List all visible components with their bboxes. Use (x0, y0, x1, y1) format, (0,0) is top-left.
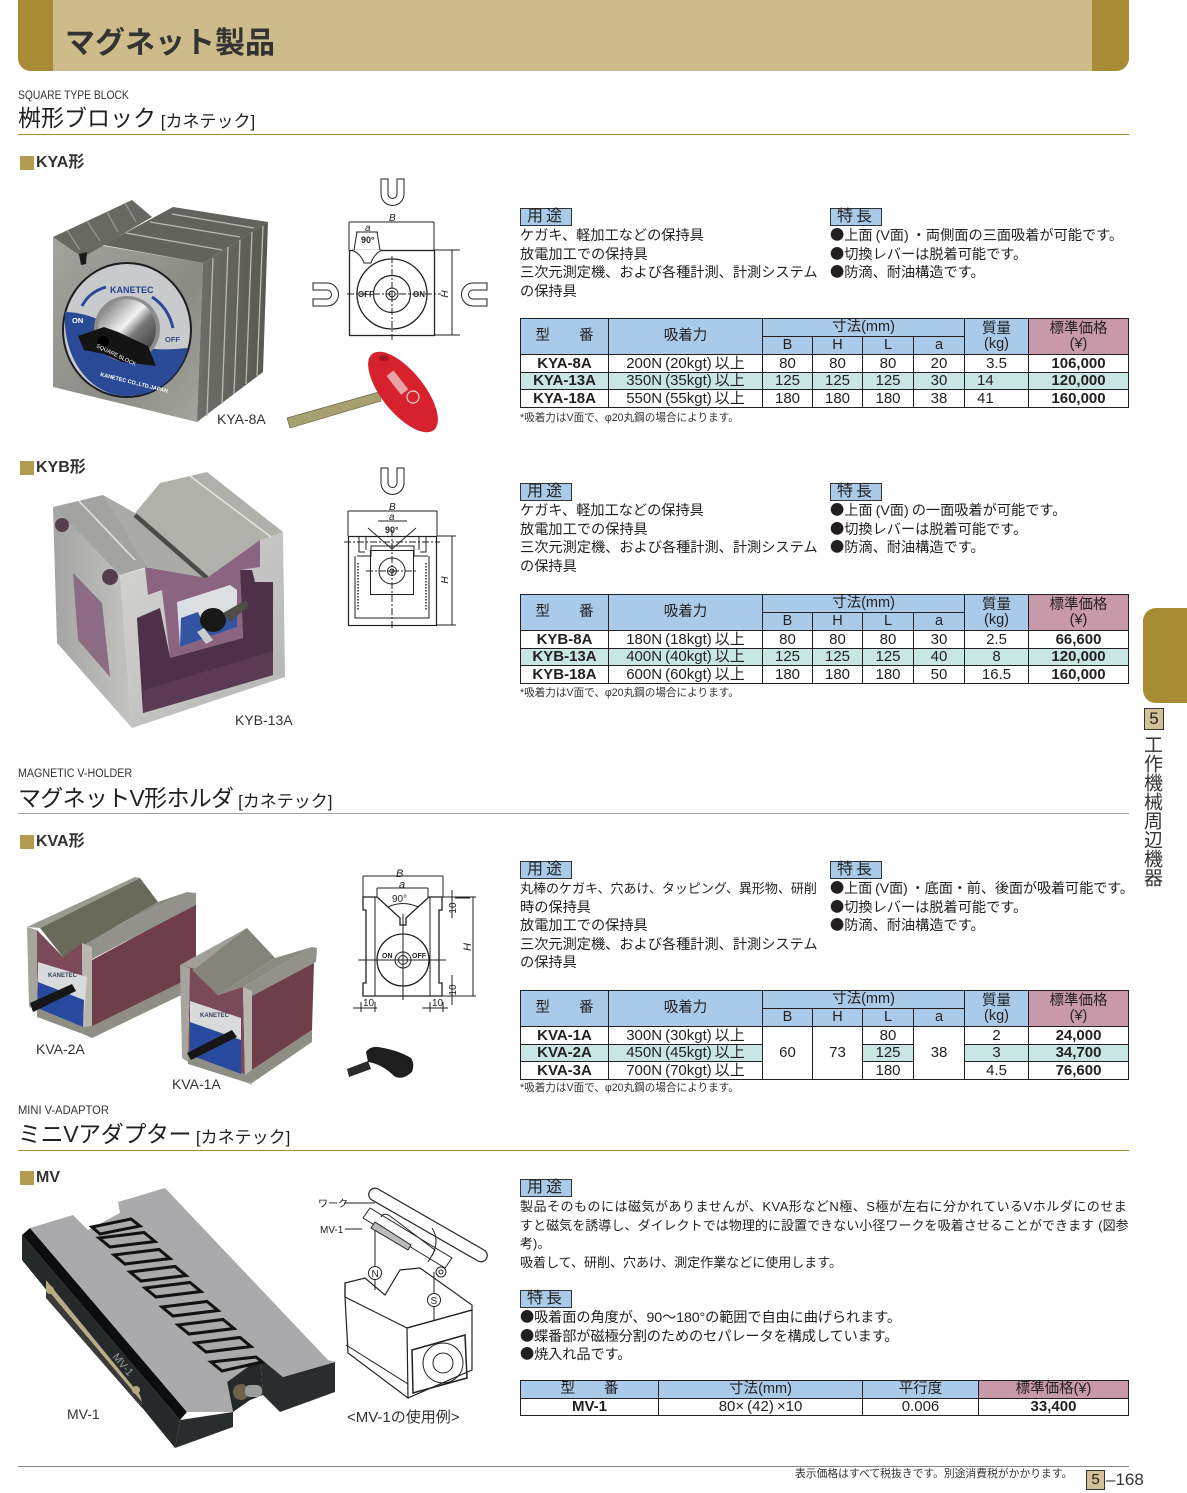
panel: MV usage (520, 1178, 1129, 1270)
table: KYA specs (520, 318, 1129, 408)
table: KVA specs: a (935, 1009, 943, 1025)
table: KYA specs: 160,000 (1051, 390, 1106, 407)
table: KVA specs: 125 (875, 1044, 901, 1061)
table: KVA specs: (kg) (984, 1008, 1009, 1024)
label: KVA-1A: KVA-1A (172, 1076, 221, 1092)
usage text: 吸着して、研削、穴あけ、測定作業などに使用します。 (520, 1254, 842, 1270)
features text: ●上面(V面)・両側面の三面吸着が可能です。 (830, 225, 1123, 245)
table: KYA specs: 350N(35kgt)以上 (626, 372, 745, 389)
features text: ●吸着面の角度が、90～180°の範囲で自由に曲げられます。 (520, 1307, 901, 1327)
usage text: 丸棒のケガキ、穴あけ、タッピング、異形物、研削 (520, 881, 817, 896)
features text (830, 878, 1134, 935)
table: KYA specs: 14 (977, 372, 994, 389)
badge: features (830, 861, 882, 879)
table: MV specs: 型 番 (560, 1381, 618, 1397)
diagram labels (318, 1198, 438, 1307)
table: KYB specs: 600N(60kgt)以上 (626, 666, 745, 683)
panel: KYB usage (520, 482, 818, 574)
Japanese heading: ミニVアダプター [カネテック] (18, 1121, 290, 1147)
diagram: MV-1 usage example (318, 1188, 487, 1398)
photo: KYA-8A block: KANETEC CO.,LTD.JAPAN (100, 372, 168, 395)
table: KYA specs: a (935, 337, 943, 353)
usage text: 時の保持具 (520, 900, 591, 916)
badge: usage (520, 208, 572, 226)
table: KVA specs: (¥) (1070, 1008, 1087, 1024)
table: KYB specs: 180 (875, 666, 901, 683)
table: KYB specs: 400N(40kgt)以上 (626, 648, 745, 665)
diagram: KVA dimension drawing (353, 868, 476, 1012)
dimension labels: H (440, 576, 451, 584)
table: KYA specs: KYA-13A (533, 372, 596, 389)
usage text: の保持具 (520, 558, 577, 574)
dimension labels: 10 (448, 984, 459, 996)
dimension labels: 90° (385, 525, 399, 535)
icon: red T-handle key (287, 341, 450, 443)
table: KYB specs: 80 (880, 631, 896, 648)
table: KYA specs: 30 (931, 372, 947, 389)
table: KVA specs: 3 (992, 1044, 1001, 1061)
section heading: mini V-adaptor (18, 1105, 1129, 1151)
table: KVA specs: H (832, 1009, 843, 1025)
table: KYA specs: B (783, 337, 792, 353)
diagram labels: N (372, 1269, 379, 1280)
table: KYB specs: KYB-13A (532, 648, 597, 665)
photo: KVA-2A block (27, 877, 196, 1038)
dimension labels: 10 (432, 998, 444, 1009)
section heading: square type block (18, 90, 1129, 135)
dimension labels: ON (413, 290, 425, 299)
badge: features: 特長 (837, 483, 875, 500)
table: KYB specs: 160,000 (1051, 666, 1106, 683)
table: KYB specs: 125 (825, 648, 850, 665)
English subtitle: MAGNETIC V-HOLDER (18, 768, 132, 780)
table: KVA specs: 4.5 (986, 1062, 1007, 1079)
table: KYA specs: 型 番 (536, 328, 594, 344)
features text: ●防滴、耐油構造です。 (830, 262, 985, 282)
dimension labels (358, 213, 451, 299)
badge: features: 特長 (837, 861, 875, 878)
badge: usage: 用途 (527, 1179, 565, 1196)
badge: usage: 用途 (527, 208, 565, 225)
table: KYA specs: 125 (775, 372, 800, 389)
section heading: magnetic V-holder (18, 768, 1129, 814)
label: MV-1 usage example: <MV-1の使用例> (347, 1409, 460, 1426)
table: MV specs: 0.006 (902, 1398, 939, 1415)
table: KVA specs: 60 (779, 1044, 796, 1061)
table: KYB specs: 40 (931, 648, 947, 665)
features text (830, 225, 1123, 282)
table: KYB specs: 50 (931, 666, 947, 683)
table: KYA specs: 180 (875, 390, 901, 407)
label: KYA-8A: KYA-8A (217, 411, 266, 427)
panel: MV features (520, 1290, 901, 1364)
features text: ●防滴、耐油構造です。 (830, 537, 985, 557)
table: KVA specs: KVA-2A (537, 1044, 592, 1061)
table: KYA specs: (kg) (984, 336, 1009, 352)
table: KYB specs: L (884, 613, 892, 629)
section rule (18, 134, 1129, 135)
table: KYA specs: L (884, 337, 892, 353)
table: KYA specs: 200N(20kgt)以上 (626, 355, 745, 372)
features text: ●切換レバーは脱着可能です。 (830, 896, 1027, 916)
table: KYB specs: 寸法(mm) (832, 595, 895, 611)
usage text: の保持具 (520, 284, 577, 300)
icon: magnet top (381, 468, 404, 494)
table: KYA specs: 20 (931, 355, 947, 372)
diagram labels: MV-1 (320, 1225, 344, 1236)
top banner (18, 0, 1129, 71)
photo: MV-1 plate: MV-1 (110, 1351, 135, 1379)
features text: ●防滴、耐油構造です。 (830, 915, 985, 935)
table: KYA specs: KYA-18A (533, 390, 596, 407)
table: KYB specs: a (935, 613, 943, 629)
dimension labels (363, 868, 474, 1009)
dimension labels: 10 (448, 902, 459, 914)
English subtitle: SQUARE TYPE BLOCK (18, 90, 129, 102)
table: KVA specs: 標準価格 (1050, 992, 1108, 1008)
usage text (520, 228, 818, 300)
table: KYA specs: 寸法(mm) (832, 319, 895, 335)
chapter number box: 5 (1149, 709, 1159, 728)
table: KYA specs: 120,000 (1051, 372, 1106, 389)
table: KYB specs: 125 (775, 648, 800, 665)
section rule (18, 1150, 1129, 1151)
table: KYB specs: 30 (931, 631, 947, 648)
features text (520, 1307, 901, 1364)
usage text: 三次元測定機、および各種計測、計測システム (520, 936, 818, 952)
features text: ●焼入れ品です。 (520, 1344, 631, 1364)
table: KYA specs: 550N(55kgt)以上 (626, 390, 745, 407)
table: KYB specs: 質量 (982, 596, 1011, 612)
usage text: の保持具 (520, 955, 577, 971)
chapter number box (1144, 708, 1164, 730)
label: KYB-13A: KYB-13A (235, 712, 293, 728)
table: KYB specs: 2.5 (986, 631, 1007, 648)
dimension labels: OFF (412, 953, 427, 960)
panel: KYB features (830, 482, 1066, 557)
table: KYB specs: 吸着力 (664, 604, 707, 620)
subheading: MV: MV (36, 1169, 60, 1186)
usage text (520, 1199, 1129, 1270)
table: KYB specs: 120,000 (1051, 648, 1106, 665)
table: KYA specs: 106,000 (1051, 355, 1106, 372)
photo: KYA-8A block: SQUARE BLOCK (95, 343, 137, 368)
table: KYA specs: 180 (775, 390, 800, 407)
usage text: すと磁気を誘導し、ダイレクトでは物理的に設置できない小径ワークを吸着させることができます (図参 (520, 1218, 1129, 1232)
features text: ●切換レバーは脱着可能です。 (830, 518, 1027, 538)
table: KVA specs: 質量 (982, 992, 1011, 1008)
table: KVA specs: 76,600 (1056, 1062, 1101, 1079)
dimension labels: 10 (363, 998, 375, 1009)
table: KYA specs: 125 (825, 372, 850, 389)
subheading: KVA: KVA形 (36, 833, 85, 850)
label: KVA-2A: KVA-2A (36, 1041, 85, 1057)
dimension labels (385, 502, 451, 584)
usage text: 考)。 (520, 1236, 550, 1251)
photo: KYA-8A block: OFF (165, 335, 180, 344)
table: KYA specs: 80 (779, 355, 796, 372)
dimension labels: a (365, 223, 371, 234)
table: KYB specs: 180N(18kgt)以上 (626, 631, 745, 648)
subheading: KYA: KYA形 (36, 154, 84, 171)
English subtitle: MINI V-ADAPTOR (18, 1105, 109, 1117)
usage text (520, 502, 818, 574)
table: KYA specs: 標準価格 (1050, 320, 1108, 336)
table: MV specs: 80×(42)×10 (719, 1398, 802, 1415)
table: KVA specs: B (783, 1009, 792, 1025)
footer rule (18, 1466, 1129, 1467)
footnote: *吸着力はV面で、φ20丸鋼の場合によります。 (520, 412, 739, 424)
usage text: 放電加工での保持具 (520, 522, 648, 538)
Japanese heading: 桝形ブロック [カネテック] (18, 105, 255, 131)
dimension labels: 90° (392, 894, 407, 905)
table: KYA specs: 80 (829, 355, 846, 372)
table: KYA specs: 41 (977, 390, 994, 407)
page title: マグネット製品 (65, 27, 275, 60)
features text: ●蝶番部が磁極分割のためのセパレータを構成しています。 (520, 1326, 899, 1346)
table: KVA specs: 34,700 (1056, 1044, 1101, 1061)
table: KYB specs: 125 (875, 648, 901, 665)
diagram labels: S (430, 1296, 438, 1307)
badge: features: 特長 (527, 1290, 565, 1307)
table: KYB specs: 型 番 (536, 604, 594, 620)
usage text: ケガキ、軽加工などの保持具 (520, 503, 704, 519)
usage text: 三次元測定機、および各種計測、計測システム (520, 540, 818, 556)
usage text: 三次元測定機、および各種計測、計測システム (520, 265, 818, 281)
table: MV specs (520, 1380, 1129, 1416)
table: KVA specs: 型 番 (536, 1000, 594, 1016)
features text: ●切換レバーは脱着可能です。 (830, 244, 1027, 264)
badge: features (830, 483, 882, 501)
usage text: ケガキ、軽加工などの保持具 (520, 228, 704, 244)
table: KYA specs: KYA-8A (537, 355, 592, 372)
panel: KVA features (830, 860, 1134, 935)
table: KYB specs: 8 (992, 648, 1001, 665)
page digits: –168 (1106, 1470, 1144, 1489)
photo: KYA-8A block: KANETEC (110, 285, 154, 295)
table: KYB specs: 標準価格 (1050, 596, 1108, 612)
table: KYB specs (520, 594, 1129, 684)
table: KYA specs: 吸着力 (664, 328, 707, 344)
chapter box: 5 (1091, 1471, 1100, 1488)
table: KYB specs: KYB-18A (532, 666, 597, 683)
chapter vertical label: 工作機械周辺機器 (1141, 735, 1162, 887)
badge: features (830, 208, 882, 226)
table: KYB specs: 180 (825, 666, 850, 683)
table: KVA specs: 450N(45kgt)以上 (626, 1044, 745, 1061)
table: MV specs: 標準価格(¥) (1016, 1381, 1091, 1397)
features text: ●上面(V面)・底面・前、後面が吸着可能です。 (830, 878, 1134, 898)
dimension labels: B (389, 502, 396, 513)
banner right accent (1092, 0, 1129, 71)
usage text (520, 881, 818, 971)
icon: magnet left (313, 283, 338, 306)
dimension labels: B (389, 213, 396, 224)
panel: KYA features (830, 208, 1123, 282)
Japanese heading: マグネットV形ホルダ [カネテック] (18, 785, 333, 811)
panel: KYA usage (520, 208, 818, 300)
dimension labels: ON (382, 953, 392, 960)
label: MV-1: MV-1 (67, 1406, 100, 1422)
dimension labels: a (389, 512, 395, 523)
table: KYA specs: 38 (931, 390, 947, 407)
table: KVA specs: 73 (829, 1044, 846, 1061)
table: KYA specs: 125 (875, 372, 901, 389)
footnote: *吸着力はV面で、φ20丸鋼の場合によります。 (520, 687, 739, 699)
photo: KYB-13A block (53, 472, 285, 728)
table: KVA specs: 700N(70kgt)以上 (626, 1062, 745, 1079)
banner left accent (18, 0, 53, 71)
badge: usage (520, 1179, 572, 1197)
table: KYB specs: 80 (779, 631, 796, 648)
footnote: *吸着力はV面で、φ20丸鋼の場合によります。 (520, 1082, 739, 1094)
side tab (1143, 608, 1187, 703)
features text (830, 500, 1066, 557)
table: KYB specs: 80 (829, 631, 846, 648)
table: KYB specs: (¥) (1070, 612, 1087, 628)
subheading: MV (20, 1169, 60, 1186)
table: KVA specs: 180 (875, 1062, 901, 1079)
table: KYA specs: 3.5 (986, 355, 1007, 372)
dimension labels: 90° (361, 235, 375, 245)
table: MV specs: MV-1 (572, 1398, 607, 1415)
table: KYB specs: B (783, 613, 792, 629)
table: KVA specs: 寸法(mm) (832, 991, 895, 1007)
icon: black handle (347, 1047, 413, 1078)
badge: usage: 用途 (527, 861, 565, 878)
table: KVA specs: 38 (931, 1044, 947, 1061)
table: KYB specs: 180 (775, 666, 800, 683)
table: KYB specs: (kg) (984, 612, 1009, 628)
badge: features: 特長 (837, 208, 875, 225)
photo: KVA-2A block: KANETEC (48, 973, 78, 979)
table: KVA specs: 2 (992, 1027, 1001, 1044)
table: KYB specs: 66,600 (1056, 631, 1101, 648)
table: MV specs: 寸法(mm) (729, 1381, 792, 1397)
usage text: 放電加工での保持具 (520, 246, 648, 262)
dimension labels: B (396, 868, 403, 880)
table: KVA specs (520, 990, 1129, 1080)
table: KYA specs: H (832, 337, 843, 353)
diagram labels: ワーク (318, 1198, 348, 1210)
table: KVA specs: 24,000 (1056, 1027, 1101, 1044)
table: KYB specs: KYB-8A (537, 631, 592, 648)
badge: features (520, 1290, 572, 1308)
section rule (18, 813, 1129, 814)
footer note: 表示価格はすべて税抜きです。別途消費税がかかります。 (795, 1468, 1072, 1480)
table: MV specs: 33,400 (1031, 1398, 1076, 1415)
chapter box (1086, 1470, 1105, 1490)
table: KYA specs: 80 (880, 355, 896, 372)
diagram: KYB dimension drawing (344, 468, 456, 630)
dimension labels: a (399, 879, 405, 891)
photo: KYA-8A block: ON (72, 316, 83, 325)
dimension labels: H (462, 943, 474, 951)
icon: magnet top (381, 179, 404, 206)
photo: KYA-8A block (53, 200, 268, 422)
table: KYB specs: H (832, 613, 843, 629)
usage text: 放電加工での保持具 (520, 918, 648, 934)
usage text: 製品そのものには磁気がありませんが、KVA形などN極、S極が左右に分かれているVホルダにのせま (520, 1199, 1127, 1214)
table: KVA specs: 吸着力 (664, 1000, 707, 1016)
dimension labels: H (440, 290, 451, 298)
diagram: KYA dimension drawing (313, 179, 487, 340)
page number (1086, 1470, 1144, 1490)
icon: magnet right (462, 283, 487, 306)
table: KYA specs: 180 (825, 390, 850, 407)
badge: usage: 用途 (527, 483, 565, 500)
photo: KVA-1A block: KANETEC (200, 1013, 230, 1019)
magnetic pole slots (92, 1219, 262, 1371)
table: KVA specs: KVA-3A (537, 1062, 592, 1079)
photo: KVA-1A block (180, 928, 317, 1085)
table: KYB specs: 16.5 (982, 666, 1011, 683)
badge: usage (520, 483, 572, 501)
table: KVA specs: 80 (880, 1027, 896, 1044)
features text: ●上面(V面)の一面吸着が可能です。 (830, 500, 1066, 520)
panel: KVA usage (520, 860, 818, 971)
table: KVA specs: L (884, 1009, 892, 1025)
subheading: KYB: KYB形 (36, 459, 86, 476)
badge: usage (520, 861, 572, 879)
table: KYA specs: (¥) (1070, 336, 1087, 352)
table: KVA specs: KVA-1A (537, 1027, 592, 1044)
table: KVA specs: 300N(30kgt)以上 (626, 1027, 745, 1044)
photo: MV-1 plate (22, 1188, 335, 1448)
dimension labels: OFF (358, 290, 374, 299)
table: KYA specs: 質量 (982, 320, 1011, 336)
table: MV specs: 平行度 (899, 1381, 942, 1397)
